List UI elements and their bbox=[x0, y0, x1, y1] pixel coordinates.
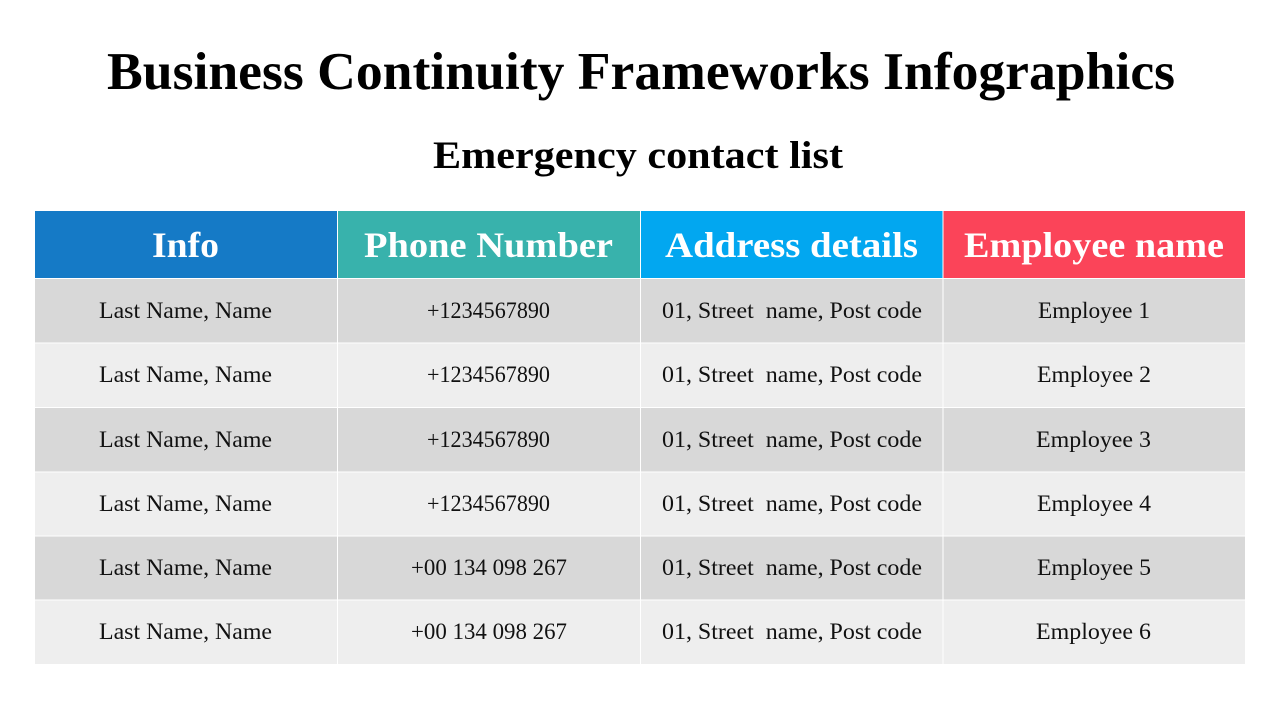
row 2: Employee 2 bbox=[1037, 362, 1151, 387]
row 6 bbox=[35, 600, 1245, 664]
header: address details bbox=[641, 211, 942, 278]
row 1: +1234567890 bbox=[427, 298, 550, 323]
header: phone number bbox=[338, 211, 640, 278]
row 3: Employee 3 bbox=[1036, 427, 1151, 452]
row 6: Employee 6 bbox=[1036, 619, 1151, 644]
table bbox=[35, 211, 1245, 664]
row 3: 01, Street name, Post code bbox=[662, 427, 922, 452]
row 2 bbox=[35, 344, 1245, 407]
row 2: Last Name, Name bbox=[99, 362, 272, 387]
row 5: Employee 5 bbox=[1037, 555, 1151, 580]
header: address details: Address details bbox=[665, 225, 918, 265]
row 3: +1234567890 bbox=[427, 427, 550, 452]
row 1 bbox=[35, 279, 1245, 342]
row 1: 01, Street name, Post code bbox=[662, 298, 922, 323]
row 4: 01, Street name, Post code bbox=[662, 491, 922, 516]
row 2: 01, Street name, Post code bbox=[662, 362, 922, 387]
row 5 bbox=[35, 536, 1245, 600]
row 6: +00 134 098 267 bbox=[411, 619, 567, 644]
header: employee name: Employee name bbox=[964, 225, 1224, 265]
row 5: 01, Street name, Post code bbox=[662, 555, 922, 580]
row 4 bbox=[35, 472, 1245, 536]
row 6: 01, Street name, Post code bbox=[662, 619, 922, 644]
header: info bbox=[35, 211, 337, 278]
row 6: Last Name, Name bbox=[99, 619, 272, 644]
row 1: Employee 1 bbox=[1038, 298, 1150, 323]
header: phone number: Phone Number bbox=[364, 225, 613, 265]
header: info: Info bbox=[152, 225, 219, 265]
row 5: +00 134 098 267 bbox=[411, 555, 567, 580]
row 4: Last Name, Name bbox=[99, 491, 272, 516]
row 3: Last Name, Name bbox=[99, 427, 272, 452]
row 4: Employee 4 bbox=[1037, 491, 1152, 516]
row 2: +1234567890 bbox=[427, 362, 550, 387]
header: employee name bbox=[944, 211, 1245, 278]
title: Business Continuity Frameworks Infographics bbox=[107, 43, 1175, 101]
row 1: Last Name, Name bbox=[99, 298, 272, 323]
row 4: +1234567890 bbox=[427, 491, 550, 516]
row 3 bbox=[35, 408, 1245, 472]
row 5: Last Name, Name bbox=[99, 555, 272, 580]
subtitle: Emergency contact list bbox=[433, 134, 843, 177]
